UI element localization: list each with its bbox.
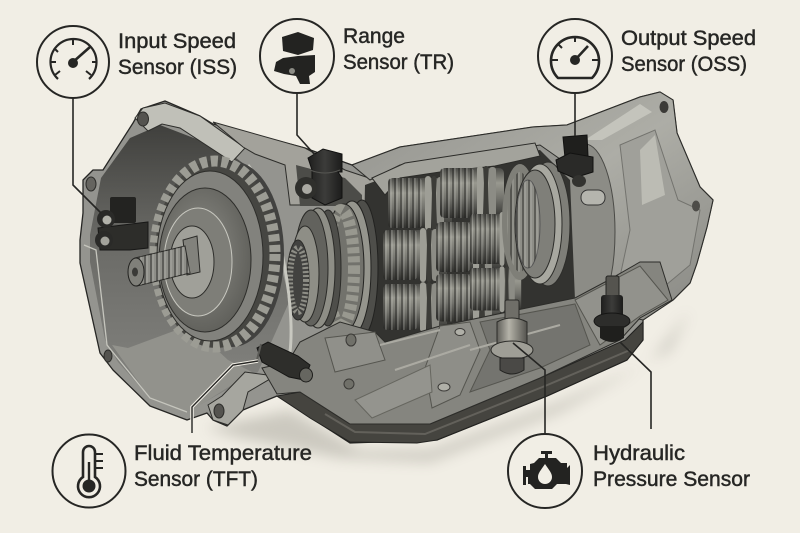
callout: input speed sensor [37,26,237,98]
sensor: ISS [95,197,148,250]
label: Sensor (OSS) [621,53,747,76]
callout: fluid temperature sensor [52,434,312,508]
rear bearing ring [555,144,615,320]
label: Pressure Sensor [593,468,750,491]
input gear [155,160,284,348]
rear extension housing [352,92,713,320]
bell housing interior [90,125,290,412]
label: Hydraulic [593,442,685,465]
transmission illustration [80,92,713,462]
leader line: hydraulic pressure [513,343,545,434]
sensor: hydraulic pressure right [594,276,630,342]
leader line: OSS [574,93,576,136]
oil pan [277,322,643,443]
input shaft [128,236,200,286]
callout: hydraulic pressure sensor [508,434,750,508]
label: Fluid Temperature [134,442,312,465]
leader line: ISS [73,98,101,213]
label: Range [343,25,405,48]
label: Input Speed [118,30,236,53]
internal gear cutaway [362,143,575,342]
mounting ears [138,112,148,126]
label: Sensor (TFT) [134,468,258,491]
icon: thermometer [52,434,126,508]
sensor: TR [295,149,342,205]
leader line: TR [297,93,315,155]
icon: tachometer [37,26,109,98]
label: Sensor (ISS) [118,56,237,79]
label: Sensor (TR) [343,51,454,74]
right clutch drum [502,162,570,286]
gear train bottom row [383,266,521,332]
callout: range sensor [260,19,454,93]
sensor: TFT [257,342,312,382]
icon: engine with oil drop [508,434,582,508]
ground shadow [205,310,690,462]
gear train middle row [383,212,521,282]
callout: output speed sensor [538,19,756,93]
sensor: OSS [556,135,593,187]
label: Output Speed [621,27,756,50]
icon: range sensor [260,19,334,93]
icon: speedometer [538,19,612,93]
valve body [262,262,672,424]
upper cover rail [372,143,540,195]
transmission case silhouette [80,92,713,443]
light separator plate [248,165,291,352]
leader line: TFT [192,361,258,433]
leader line: hydraulic pressure second [620,342,651,429]
bell housing rim [135,103,245,162]
gear train top row [388,166,504,230]
pin [581,190,605,205]
sensor: hydraulic pressure left [491,300,533,374]
clutch pack [287,200,378,336]
